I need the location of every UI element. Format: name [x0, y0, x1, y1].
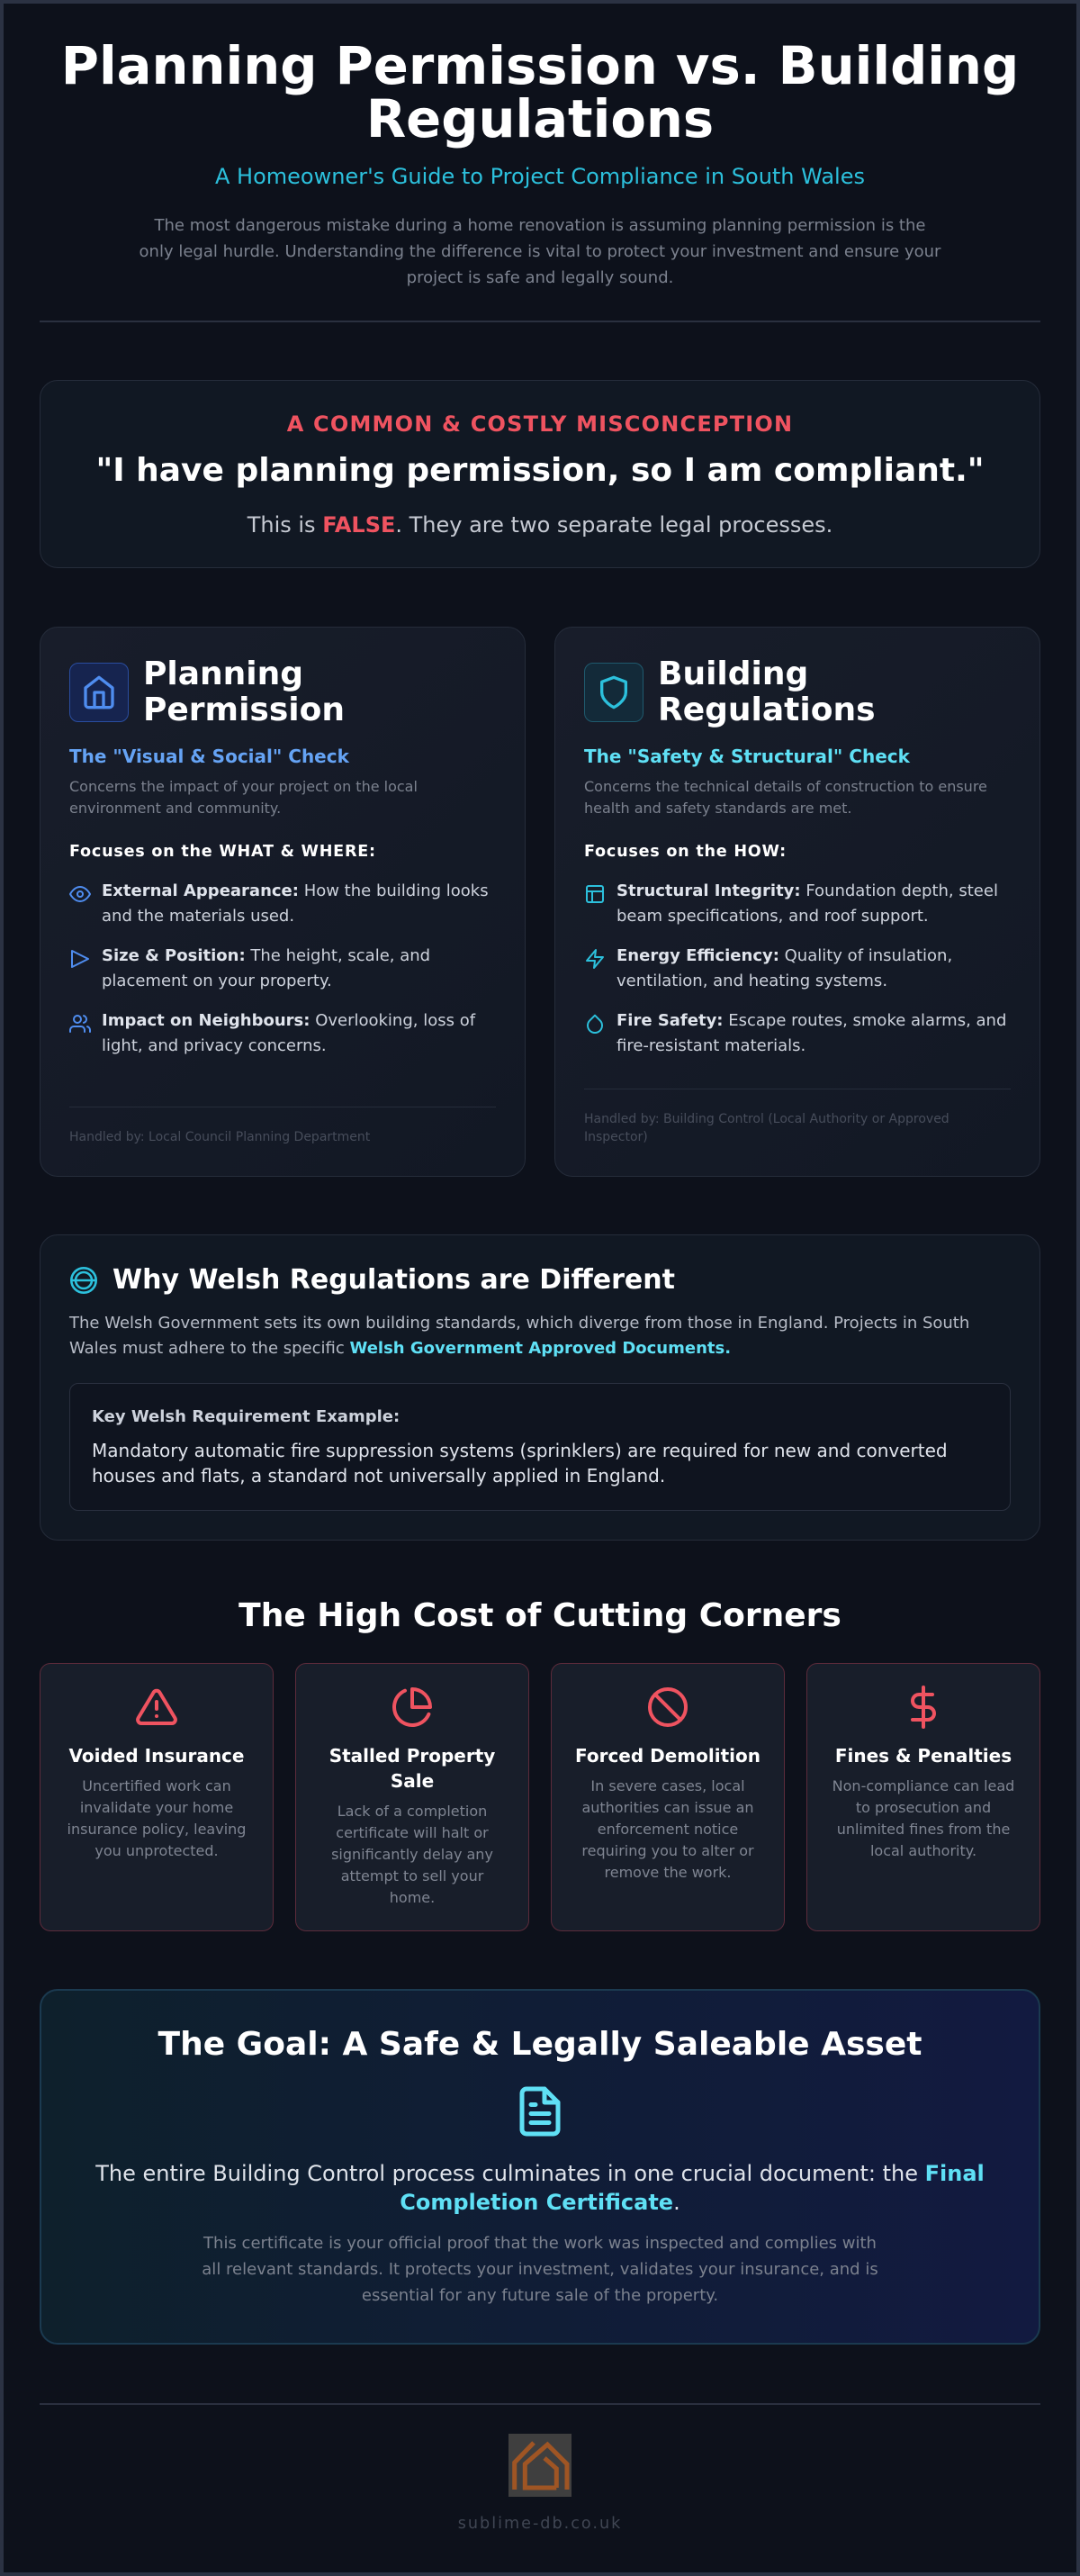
card title: Fines & Penalties	[835, 1745, 1012, 1767]
item: size and position	[71, 946, 430, 990]
section heading: high cost: The High Cost of Cutting Corners	[238, 1597, 842, 1634]
item: fire safety: fire-resistant materials.	[616, 1036, 806, 1055]
item: energy efficiency: Energy Efficiency: Quality of insulation,	[616, 946, 952, 965]
heading: Why Welsh Regulations are Different	[112, 1264, 675, 1296]
item: external appearance: External Appearance: How the building looks	[102, 881, 489, 900]
card text	[68, 1777, 246, 1859]
card text: requiring you to alter or	[581, 1842, 754, 1859]
intro paragraph: project is safe and legally sound.	[407, 268, 673, 287]
card text	[832, 1777, 1014, 1859]
callout text: Mandatory automatic fire suppression systems (sprinklers) are required for new and converted	[92, 1440, 948, 1461]
key statement: Completion Certificate.	[400, 2190, 680, 2215]
item: fire safety: Fire Safety: Escape routes, smoke alarms, and	[616, 1011, 1006, 1030]
card text	[581, 1777, 754, 1881]
panel: the goal	[40, 1989, 1040, 2345]
focus heading: Focuses on the WHAT & WHERE:	[69, 843, 376, 861]
intro paragraph	[140, 216, 941, 287]
item: energy efficiency	[586, 946, 952, 990]
item: structural integrity: beam specifications, and roof support.	[616, 907, 929, 926]
item: size and position: placement on your property.	[102, 972, 332, 990]
card title: Sale	[391, 1770, 434, 1792]
panel: planning permission	[40, 627, 526, 1177]
title	[61, 36, 1019, 149]
footer	[458, 2434, 622, 2533]
misconception verdict: This is FALSE. They are two separate legal processes.	[248, 512, 832, 538]
callout label: Key Welsh Requirement Example:	[92, 1407, 400, 1426]
card text: you unprotected.	[94, 1842, 219, 1859]
header	[61, 36, 1019, 287]
card text: home.	[390, 1889, 435, 1906]
item: structural integrity	[586, 881, 998, 926]
heading: Permission	[143, 691, 345, 728]
panel: misconception	[40, 380, 1040, 568]
panel: building regulations	[554, 627, 1040, 1177]
misconception label: A COMMON & COSTLY MISCONCEPTION	[287, 411, 793, 437]
intro paragraph: only legal hurdle. Understanding the difference is vital to protect your investment and ensure your	[140, 242, 940, 261]
subtitle: A Homeowner's Guide to Project Compliance in South Wales	[215, 164, 865, 189]
supporting text: This certificate is your official proof that the work was inspected and complies with	[203, 2234, 877, 2253]
heading: Building	[658, 655, 808, 692]
callout text: houses and flats, a standard not universally applied in England.	[92, 1465, 665, 1487]
card title	[329, 1745, 495, 1792]
card text: remove the work.	[605, 1864, 731, 1881]
icon: pie chart	[392, 1687, 432, 1727]
logo	[508, 2434, 572, 2497]
focus heading: Focuses on the HOW:	[584, 843, 787, 861]
card text: certificate will halt or	[336, 1824, 489, 1841]
body text: Wales must adhere to the specific Welsh Government Approved Documents.	[69, 1339, 731, 1358]
title: Planning Permission vs. Building	[61, 36, 1019, 96]
card: fines	[806, 1663, 1040, 1931]
item: impact on neighbours: Impact on Neighbours: Overlooking, loss of	[102, 1011, 475, 1030]
card text: Lack of a completion	[338, 1803, 487, 1820]
item: fire safety	[587, 1011, 1006, 1055]
website: sublime-db.co.uk	[458, 2515, 622, 2533]
heading: Planning	[143, 655, 303, 692]
body text	[68, 1314, 969, 1358]
card text: insurance policy, leaving	[68, 1821, 246, 1838]
card: stalled sale	[295, 1663, 529, 1931]
supporting text: essential for any future sale of the property.	[362, 2286, 718, 2305]
heading	[658, 655, 876, 728]
heading	[143, 655, 345, 728]
description: environment and community.	[69, 800, 281, 817]
heading: The Goal: A Safe & Legally Saleable Asset	[158, 2026, 922, 2063]
handled by: Handled by: Local Council Planning Department	[69, 1130, 370, 1144]
icon: prohibited	[648, 1687, 688, 1727]
item: external appearance	[69, 881, 489, 926]
card text: local authority.	[870, 1842, 976, 1859]
item: external appearance: and the materials used.	[102, 907, 294, 926]
handled by: Handled by: Building Control (Local Authority or Approved	[584, 1112, 950, 1126]
card text	[331, 1803, 493, 1906]
panel: welsh regulations	[40, 1234, 1040, 1541]
icon: house	[69, 663, 129, 722]
title: Regulations	[366, 89, 714, 149]
card text: significantly delay any	[331, 1846, 493, 1863]
icon: globe ring	[70, 1267, 97, 1294]
card text: unlimited fines from the	[837, 1821, 1010, 1838]
tagline: The "Visual & Social" Check	[69, 746, 349, 767]
key statement	[95, 2161, 985, 2215]
item: structural integrity: Structural Integrity: Foundation depth, steel	[616, 881, 998, 900]
card title: Forced Demolition	[575, 1745, 760, 1767]
item: energy efficiency: ventilation, and heating systems.	[616, 972, 887, 990]
description: Concerns the impact of your project on the local	[69, 778, 418, 795]
tagline: The "Safety & Structural" Check	[584, 746, 910, 767]
key statement: The entire Building Control process culminates in one crucial document: the Final	[95, 2161, 985, 2186]
card text: authorities can issue an	[581, 1799, 754, 1816]
item: size and position: Size & Position: The height, scale, and	[102, 946, 430, 965]
item: impact on neighbours	[69, 1011, 475, 1055]
card title: Voided Insurance	[68, 1745, 244, 1767]
icon: shield	[584, 663, 644, 722]
intro paragraph: The most dangerous mistake during a home renovation is assuming planning permission is the	[155, 216, 925, 235]
card text: Non-compliance can lead	[832, 1777, 1014, 1794]
card text: Uncertified work can	[82, 1777, 231, 1794]
icon: warning	[136, 1689, 177, 1725]
handled by	[584, 1112, 950, 1144]
body text: The Welsh Government sets its own building standards, which diverge from those in England. Projects in South	[69, 1314, 969, 1333]
card text: to prosecution and	[856, 1799, 991, 1816]
handled by: Inspector)	[584, 1130, 648, 1144]
callout text	[92, 1440, 948, 1487]
icon: document	[520, 2087, 560, 2136]
description: health and safety standards are met.	[584, 800, 852, 817]
key requirement callout	[69, 1383, 1011, 1511]
description: Concerns the technical details of construction to ensure	[584, 778, 987, 795]
supporting text: all relevant standards. It protects your investment, validates your insurance, and is	[202, 2260, 878, 2279]
description	[69, 778, 418, 817]
card: voided insurance	[40, 1663, 274, 1931]
card title: Stalled Property	[329, 1745, 495, 1767]
card text: invalidate your home	[80, 1799, 233, 1816]
icon: dollar	[911, 1686, 936, 1729]
supporting text	[202, 2234, 878, 2305]
heading: Regulations	[658, 691, 876, 728]
misconception quote: "I have planning permission, so I am compliant."	[95, 452, 985, 489]
card text: In severe cases, local	[590, 1777, 745, 1794]
description	[584, 778, 987, 817]
card: forced demolition	[551, 1663, 785, 1931]
item: impact on neighbours: light, and privacy concerns.	[102, 1036, 327, 1055]
card text: enforcement notice	[598, 1821, 738, 1838]
card text: attempt to sell your	[341, 1867, 483, 1885]
